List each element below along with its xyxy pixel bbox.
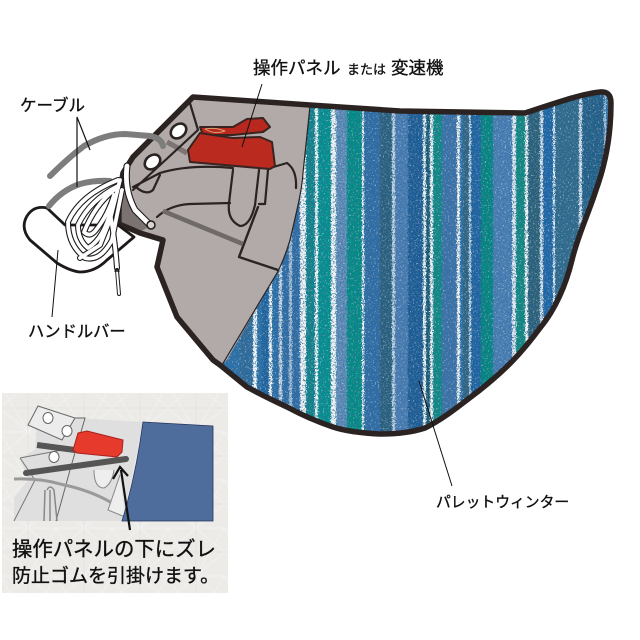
- inset arrow: [113, 467, 130, 530]
- handlebar: [24, 207, 134, 272]
- label: handlebar: ハンドルバー: [28, 323, 126, 341]
- inset rubber bands: [37, 445, 75, 450]
- inset panel: mounting detail: [2, 393, 228, 593]
- red control panel: [188, 118, 275, 169]
- cover illustration: [118, 80, 615, 447]
- grommet holes: [142, 121, 189, 172]
- inset loop and straps: [94, 470, 114, 488]
- leader line: pallet winter: [419, 381, 452, 486]
- label: pallet winter: パレットウィンター: [436, 494, 569, 511]
- outer black outline: [119, 92, 611, 434]
- grey band between grommets: [167, 142, 187, 153]
- inset blue cover: [122, 422, 213, 521]
- inset caption: 防止ゴムを引掛けます。: [12, 565, 219, 587]
- inset caption: 操作パネルの下にズレ: [12, 538, 216, 561]
- leader line: handlebar: [52, 250, 58, 317]
- carpet left edge line: [222, 106, 310, 365]
- cover body: grey base: [118, 92, 611, 434]
- inset red panel: [73, 431, 123, 457]
- leader lines: cable: [77, 117, 90, 187]
- cables: [49, 134, 163, 206]
- inset cord: [44, 487, 57, 521]
- label: operation panel or transmission: [253, 58, 444, 78]
- label: cable: ケーブル: [20, 95, 85, 115]
- inset caption: [12, 538, 219, 587]
- inset grey cover: [14, 418, 142, 521]
- grey strap band: [163, 211, 243, 244]
- label: operation panel or transmission: 操作パネル: [253, 58, 340, 78]
- leader line: operation panel: [242, 84, 262, 147]
- inset diagram: [14, 406, 213, 530]
- elastic cord bundle: [68, 166, 155, 294]
- inset background: [2, 393, 228, 593]
- carpet fabric: striped blue and teal pattern: [223, 94, 608, 432]
- strap and fold lines on grey section: [133, 100, 296, 270]
- label: operation panel or transmission: または: [347, 62, 386, 77]
- label: operation panel or transmission: 変速機: [391, 58, 444, 78]
- dark shaded area under the cord: [119, 190, 150, 232]
- inset holes: [43, 412, 53, 424]
